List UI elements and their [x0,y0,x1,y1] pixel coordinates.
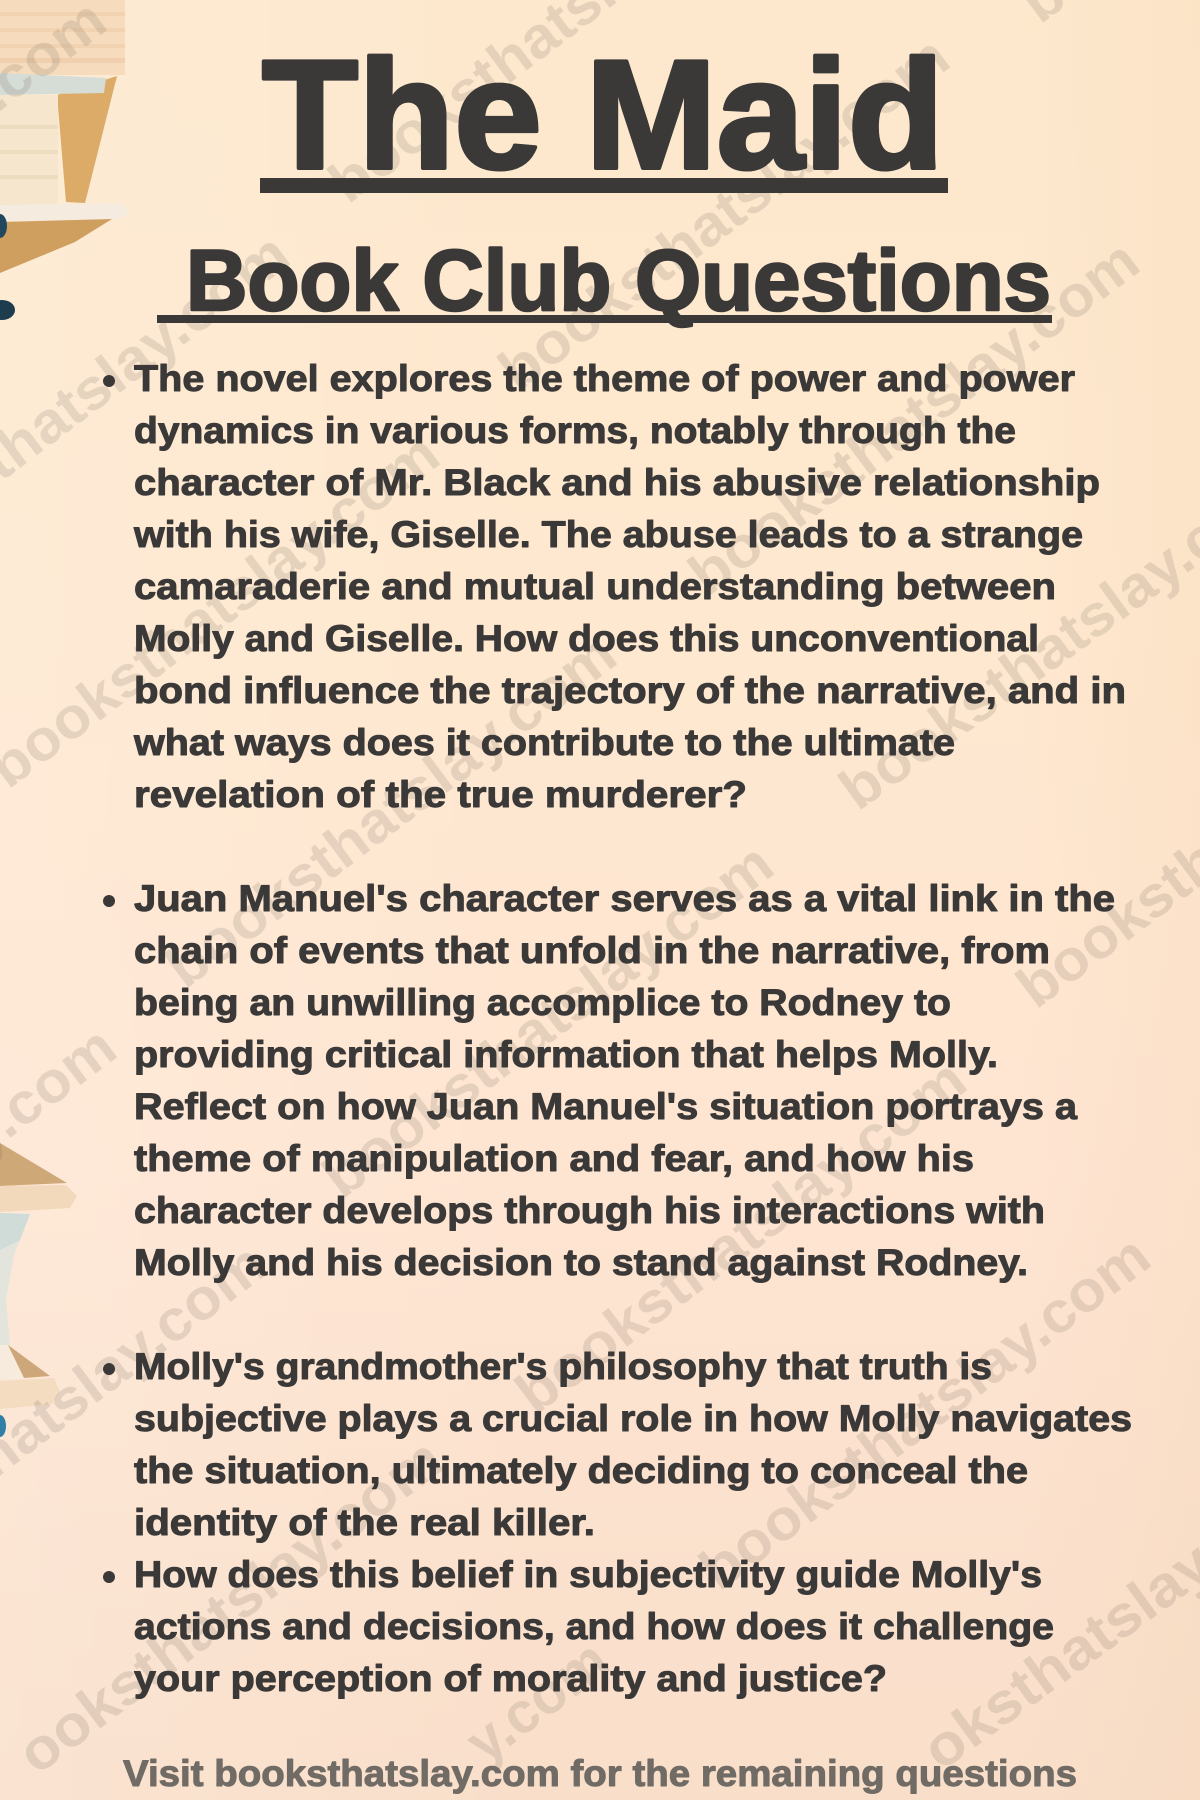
question 4: How does this belief in subjectivity guide Molly's [134,1554,1042,1595]
question 1: camaraderie and mutual understanding between [134,566,1056,607]
illustration: stacked books lower left [0,1143,77,1437]
question 1: dynamics in various forms, notably through the [134,410,1016,451]
question 1: character of Mr. Black and his abusive relationship [134,462,1100,503]
question 1: The novel explores the theme of power and power [134,358,1075,399]
subtitle: Book Club Questions [186,233,1051,329]
question 2: character develops through his interactions with [134,1190,1045,1231]
watermarks: booksthatslay.com [677,227,1151,607]
watermarks: ooksthatslay.com [6,1426,455,1786]
question 1: Molly and Giselle. How does this unconventional [134,618,1039,659]
question 1: what ways does it contribute to the ultimate [133,722,955,763]
title: The Maid [262,28,944,201]
question 3: the situation, ultimately deciding to conceal the [134,1450,1028,1491]
question 2: Molly and his decision to stand against Rodney. [134,1242,1028,1283]
question 2: Juan Manuel's character serves as a vital link in the [134,878,1115,919]
question 4: actions and decisions, and how does it challenge [134,1606,1054,1647]
question 1: bond influence the trajectory of the narrative, and in [134,670,1126,711]
watermarks: booksthatslay.com [154,620,628,1000]
watermarks: booksthatslay.com [487,23,961,403]
question 3: Molly's grandmother's philosophy that truth is [134,1346,992,1387]
question 2: theme of manipulation and fear, and how his [134,1138,974,1179]
question 2: Reflect on how Juan Manuel's situation portrays a [134,1086,1077,1127]
question 3: subjective plays a crucial role in how Molly navigates [134,1398,1132,1439]
illustration: stacked books top left [0,0,129,320]
question 2: chain of events that unfold in the narrative, from [134,930,1050,971]
watermarks: booksthatslay.com [311,830,785,1210]
question 2 [103,878,1115,1283]
question 4 [103,1554,1054,1699]
question 1: with his wife, Giselle. The abuse leads to a strange [133,514,1083,555]
footer call to action: Visit booksthatslay.com for the remaining questions [123,1753,1077,1794]
watermarks: booksthatslay.com [504,1046,978,1426]
watermarks: booksthatslay.com [688,1222,1162,1602]
question 1: revelation of the true murderer? [134,774,747,815]
question 3 [103,1346,1132,1543]
question 1 [103,358,1126,815]
watermarks: y.com [454,1627,621,1775]
question 4: your perception of morality and justice? [134,1658,887,1699]
question 3: identity of the real killer. [134,1502,595,1543]
question 2: providing critical information that helps Molly. [134,1034,998,1075]
question 2: being an unwilling accomplice to Rodney to [134,982,951,1023]
